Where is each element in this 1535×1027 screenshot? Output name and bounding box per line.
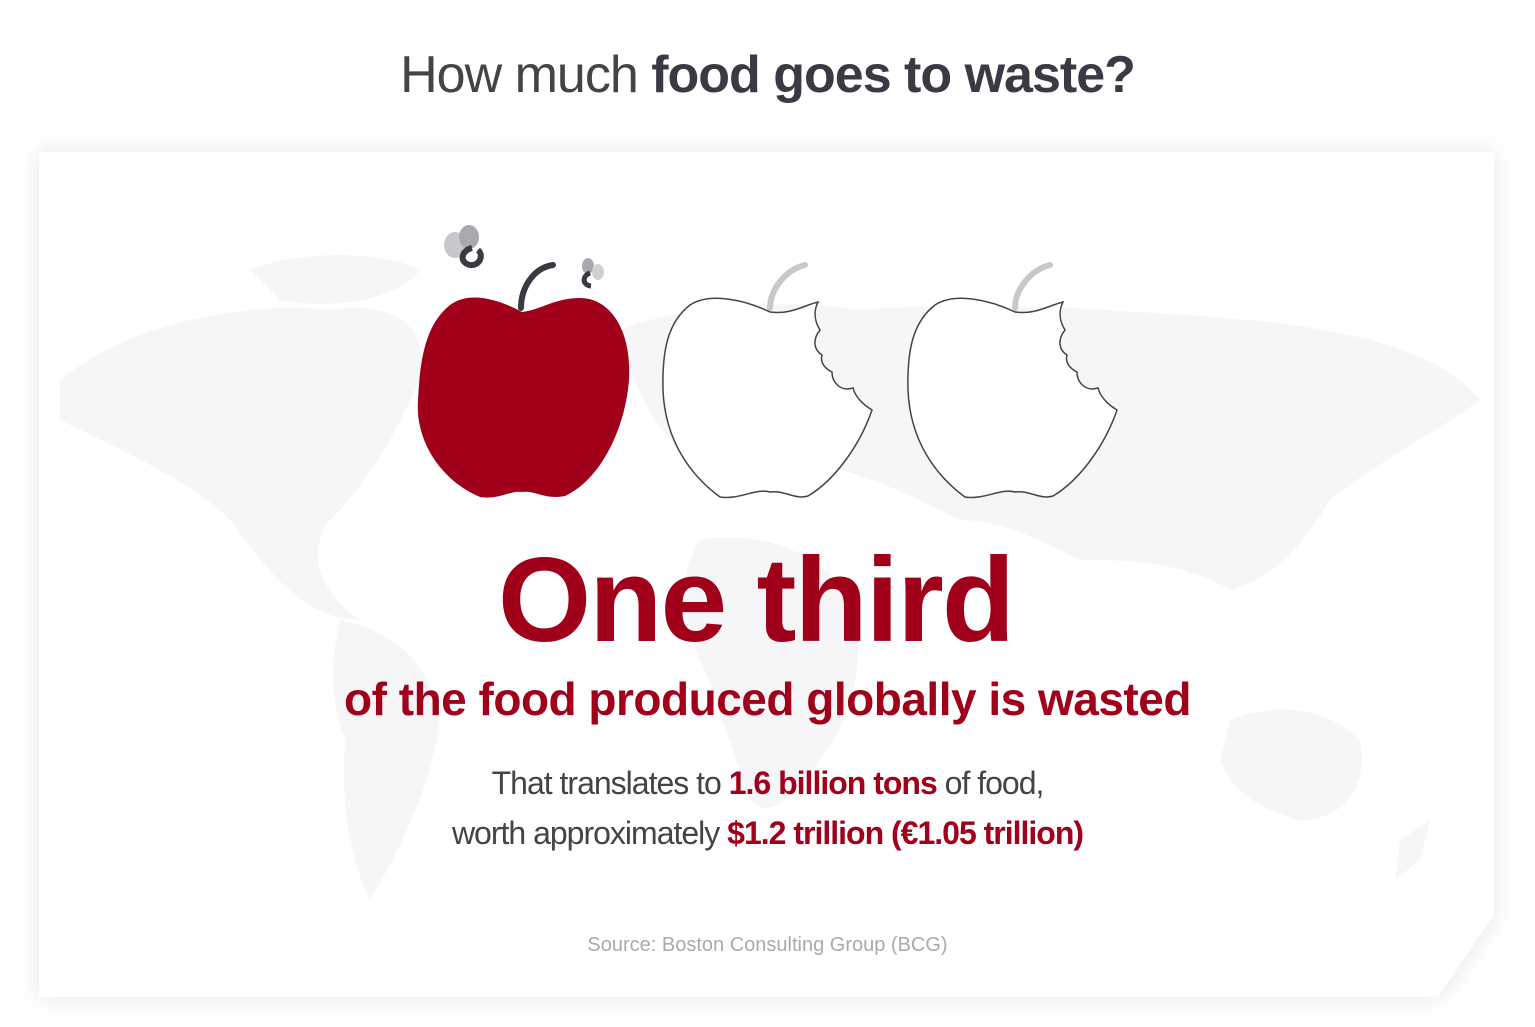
headline: One third (498, 533, 1013, 667)
icon: bitten apple 1 (663, 265, 872, 497)
icon: fly small (582, 258, 604, 286)
icon: bitten apple 2 (908, 265, 1117, 497)
text block: stats: worth approximately $1.2 trillion (€1.05 trillion) (452, 815, 1083, 851)
subheadline: of the food produced globally is wasted (344, 673, 1191, 725)
text block: stats (452, 765, 1083, 851)
icon: fly big (444, 225, 481, 265)
icon: red apple (418, 265, 629, 498)
source: Source: Boston Consulting Group (BCG) (587, 934, 948, 956)
title: How much food goes to waste? (400, 46, 1135, 104)
panel: card (34, 146, 1500, 1002)
text block: stats: That translates to 1.6 billion tons of food, (492, 765, 1043, 801)
